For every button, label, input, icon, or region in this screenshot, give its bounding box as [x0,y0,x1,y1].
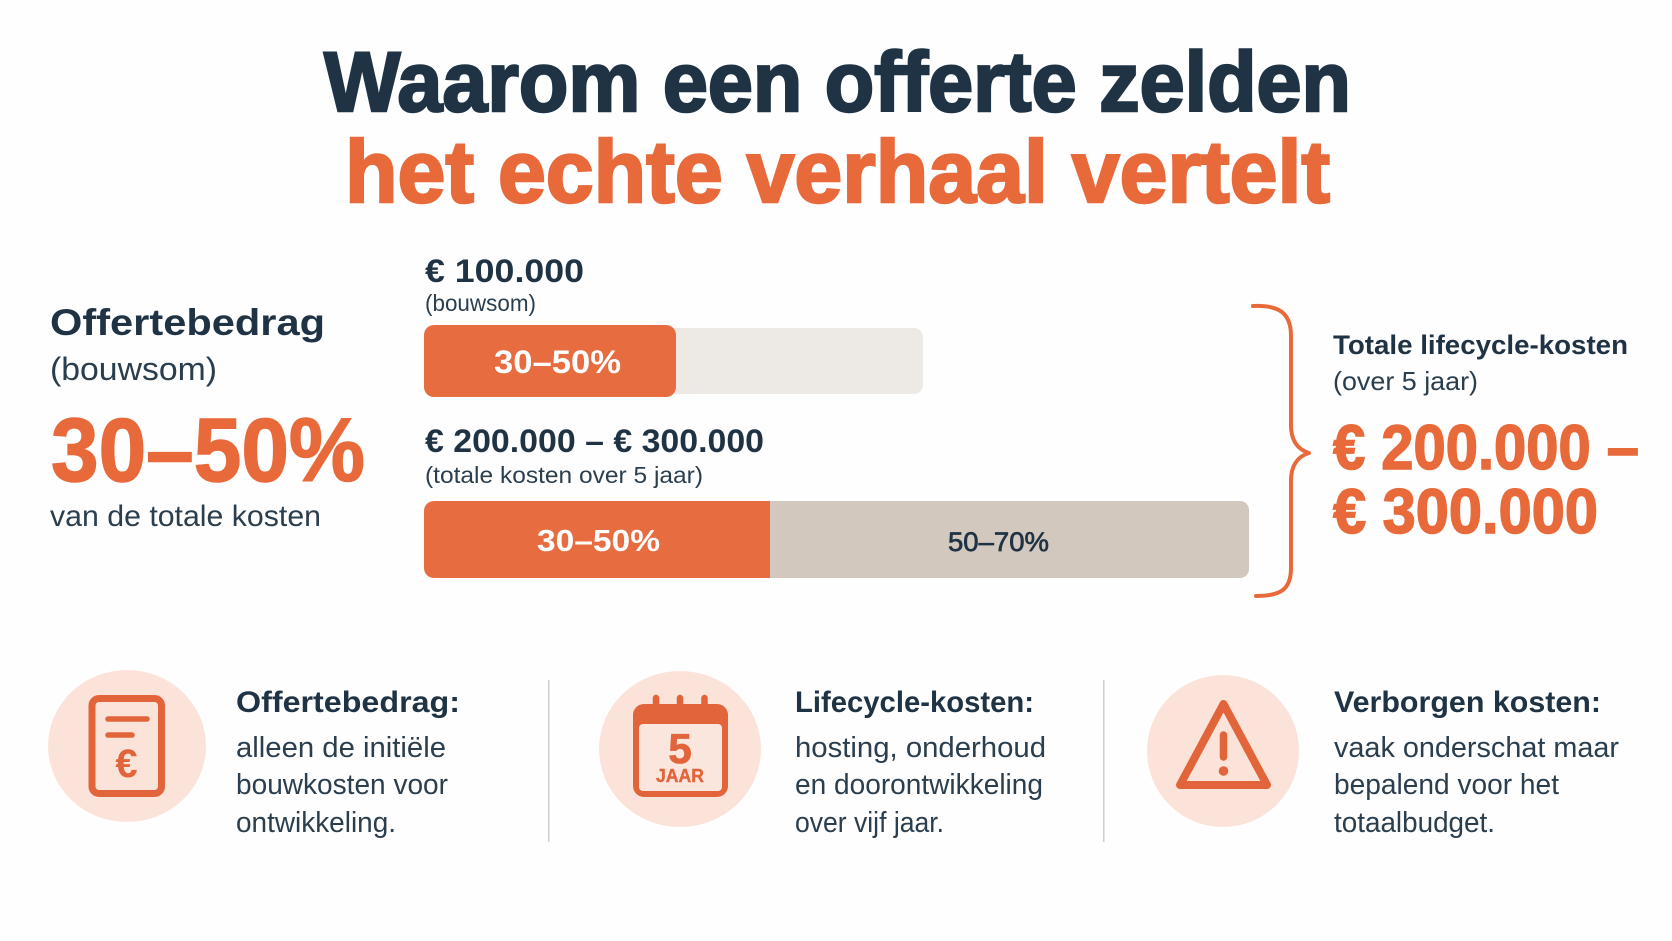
amount [1333,413,1639,547]
panel: lifecycle explanation [599,671,1046,839]
icon: warning triangle [1147,675,1299,827]
bar 1 background [660,328,923,394]
text: lifecycle-kosten [795,686,1046,839]
text: lifecycle-kosten: en doorontwikkeling [795,769,1043,801]
text: verborgen kosten [1334,686,1619,839]
big number: 30-50%: 30–50% [51,401,365,501]
brace [1253,306,1309,596]
bar 1 value: 30–50% [494,344,621,380]
heading: totale lifecycle-kosten: Totale lifecycle-kosten [1333,330,1628,360]
bar 2 grey segment [750,501,1249,578]
label: over 5 jaar: (over 5 jaar) [1333,366,1478,396]
text: verborgen kosten: totaalbudget. [1334,807,1495,839]
heading: offertebedrag: Offertebedrag [50,302,325,343]
panel: offertebedrag summary [50,302,365,533]
title: het echte verhaal vertelt [345,122,1330,221]
bar sublabel: totale kosten: (totale kosten over 5 jaar) [425,462,703,488]
text: verborgen kosten: vaak onderschat maar [1334,732,1619,764]
icon: calendar 5 jaar [599,671,761,827]
panel: hidden costs explanation [1147,675,1619,839]
text: offertebedrag: alleen de initiële [236,732,446,764]
text: lifecycle-kosten: hosting, onderhoud [795,732,1046,764]
text: offertebedrag: Offertebedrag: [236,686,460,719]
text: lifecycle-kosten: Lifecycle-kosten: [795,686,1034,719]
title: Waarom een offerte zelden [324,35,1351,129]
icon: calendar 5 jaar: JAAR [656,766,704,786]
text: verborgen kosten: Verborgen kosten: [1334,686,1601,719]
panel: bar chart comparison [424,253,1249,578]
panel: total lifecycle costs [1333,330,1639,547]
panel: offertebedrag explanation [48,670,460,839]
amount: € 300.000 [1333,477,1598,547]
bar 2 orange segment [424,501,770,578]
icon: document with euro: € [115,742,138,786]
bar sublabel: bouwsom: (bouwsom) [425,290,536,316]
bar 2 grey value: 50–70% [948,527,1049,557]
caption: van de totale kosten: van de totale kosten [50,500,321,533]
amount: € 200.000 – [1333,413,1639,483]
text: lifecycle-kosten: over vijf jaar. [795,807,944,839]
bar 1 orange segment [424,325,676,397]
text: offertebedrag [236,686,460,839]
text: offertebedrag: bouwkosten voor [236,769,448,801]
icon: calendar 5 jaar: 5 [668,725,692,772]
text: verborgen kosten: bepalend voor het [1334,769,1559,801]
label: bouwsom: (bouwsom) [50,351,217,387]
bar 2 orange value: 30–50% [537,523,660,558]
text: offertebedrag: ontwikkeling. [236,807,396,839]
title [324,35,1351,221]
bar label: 100.000: € 100.000 [425,253,584,289]
icon: document with euro [48,670,206,822]
bar label: 200.000 - 300.000: € 200.000 – € 300.000 [425,423,764,459]
